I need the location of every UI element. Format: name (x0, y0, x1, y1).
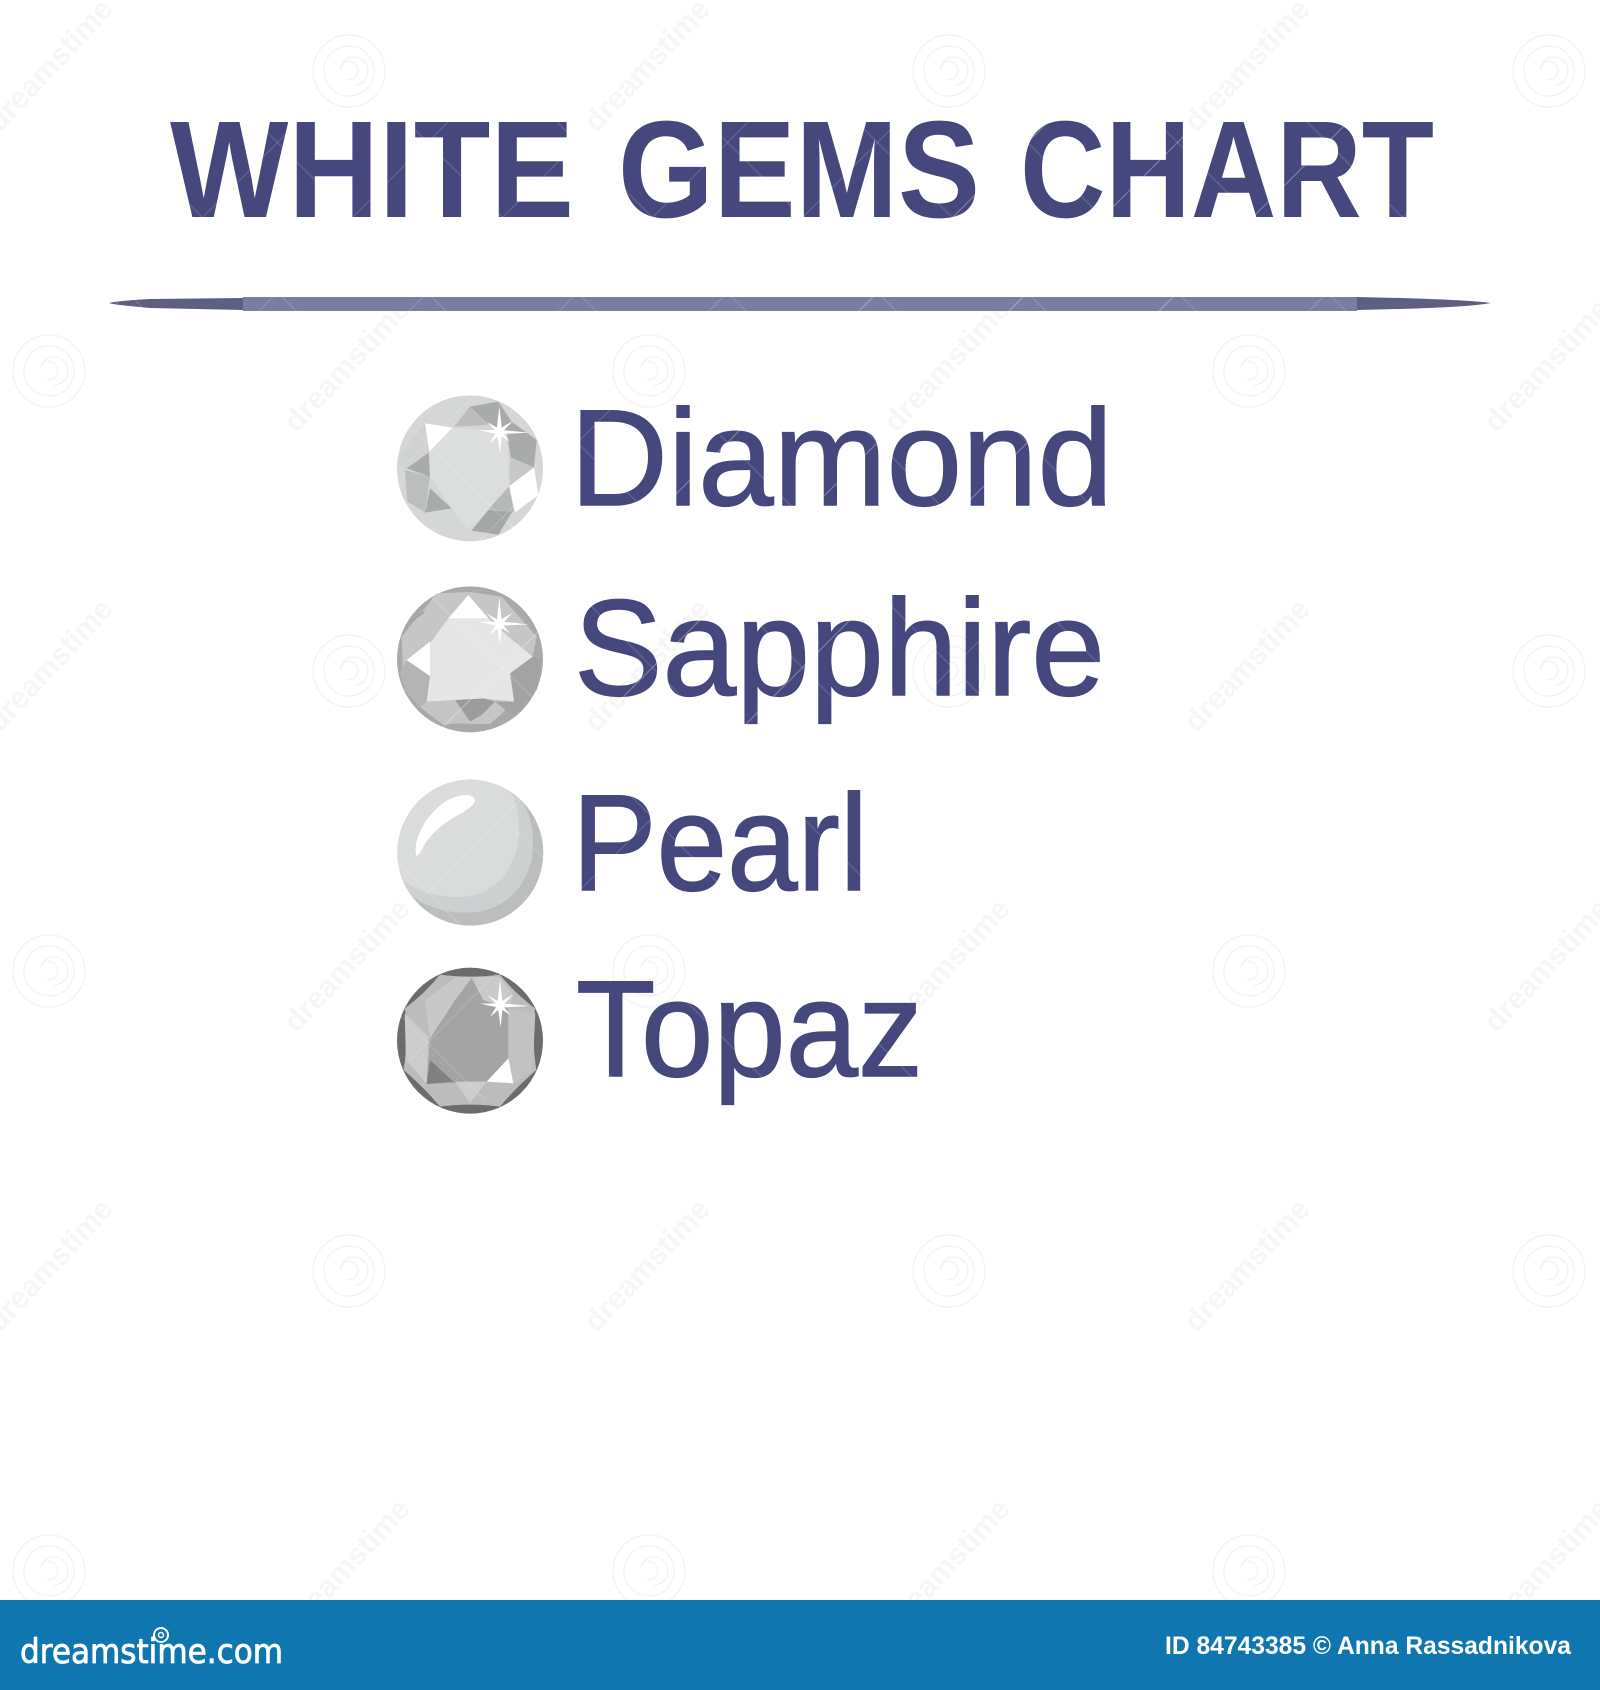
text: dreamstime (878, 293, 1017, 438)
text: dreamstime (1178, 1193, 1317, 1338)
gem label: Diamond: Diamond (570, 382, 1113, 535)
footer credit: image ID and author: ID 84743385 © Anna Rassadnikova (1165, 1632, 1572, 1660)
gem label: Topaz: Topaz (576, 953, 923, 1106)
icon: sapphire gem (397, 586, 543, 732)
title: WHITE (170, 93, 574, 247)
title (170, 93, 1434, 247)
text: dreamstime (578, 1193, 717, 1338)
text: dreamstime (578, 593, 717, 738)
title: GEMS (618, 93, 980, 247)
gem label: Pearl: Pearl (572, 767, 868, 920)
text: dreamstime (278, 1493, 417, 1638)
text: dreamstime (278, 293, 417, 438)
text: dreamstime (278, 893, 417, 1038)
footer logo: dreamstime.com: dreamstime.com (20, 1632, 283, 1672)
icon: pearl gem (397, 780, 544, 926)
text: dreamstime (878, 893, 1017, 1038)
footer bar (0, 1600, 1600, 1690)
icon: diamond gem (397, 395, 543, 541)
text: dreamstime (1178, 593, 1317, 738)
icon: topaz gem (397, 968, 543, 1114)
gem label: Sapphire: Sapphire (574, 572, 1105, 725)
text: dreamstime (878, 1493, 1017, 1638)
title underline bar (109, 297, 1491, 311)
title: CHART (1020, 93, 1434, 247)
